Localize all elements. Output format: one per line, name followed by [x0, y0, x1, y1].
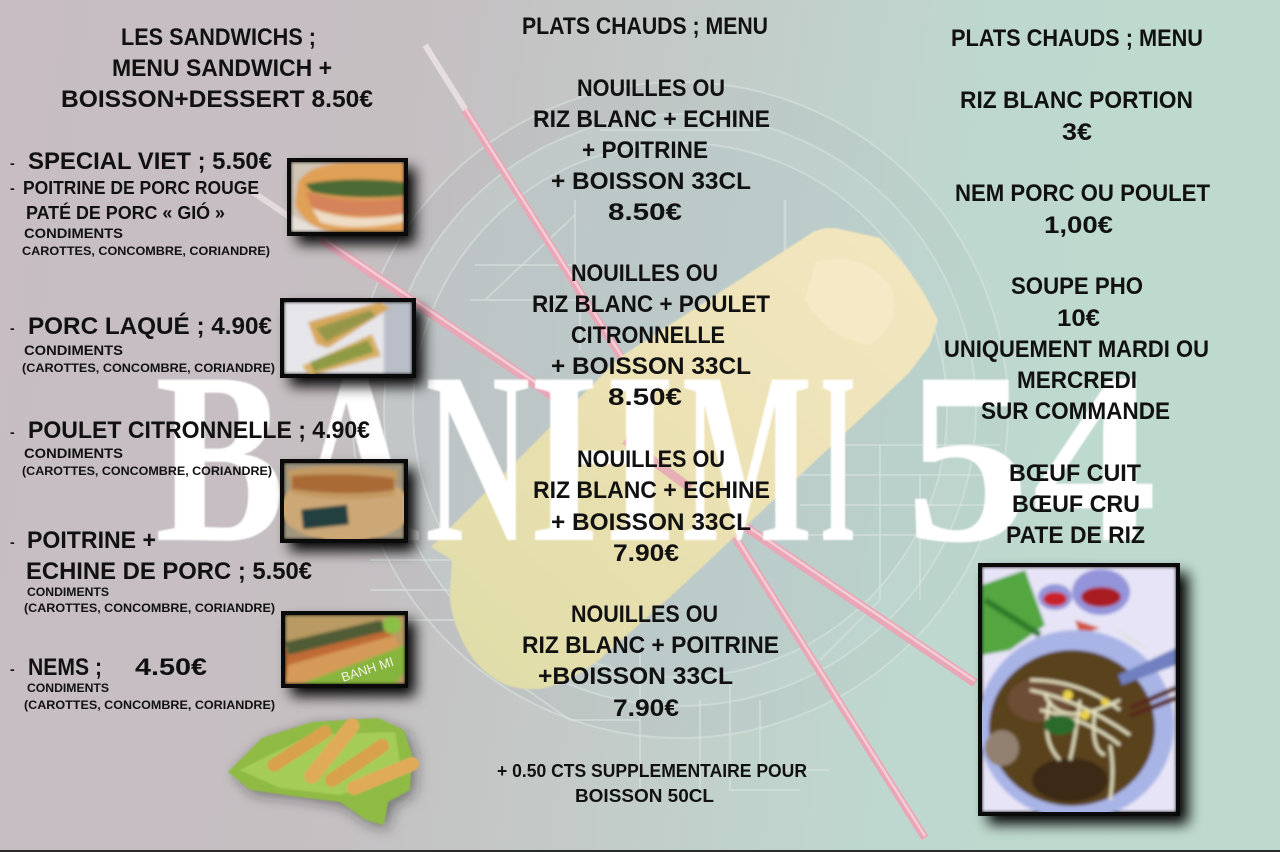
item: poulet citronnelle: POULET CITRONNELLE ; 4.90€ — [28, 417, 370, 444]
menu: echine et poitrine: + POITRINE — [582, 137, 708, 164]
item: poulet citronnelle: CONDIMENTS — [24, 445, 123, 461]
note: drink supplement: BOISSON 50CL — [575, 786, 714, 806]
item: soupe pho: MERCREDI — [1017, 367, 1137, 394]
menu: echine et poitrine: 8.50€ — [608, 199, 682, 226]
photo: banh mi with green banner — [281, 611, 415, 696]
item: soup options: PATE DE RIZ — [1006, 522, 1145, 549]
restaurant name: BANH MI 54: N — [425, 322, 530, 593]
item: soupe pho: SUR COMMANDE — [981, 398, 1170, 425]
menu: poulet citronnelle: CITRONNELLE — [571, 322, 725, 349]
heading: hot dishes right: PLATS CHAUDS ; MENU — [951, 25, 1203, 52]
menu: echine et poitrine: NOUILLES OU — [577, 75, 725, 102]
restaurant name: BANH MI 54: I — [820, 322, 856, 593]
item: riz blanc: 3€ — [1062, 119, 1092, 146]
panel: hot dishes menu, centre — [497, 13, 807, 806]
item: special viet: - — [10, 155, 15, 171]
chopstick: long diagonal — [425, 45, 925, 838]
item: poitrine echine: - — [10, 534, 15, 550]
photo: banh mi with green banner: BANH MI — [339, 654, 395, 685]
item: special viet: POITRINE DE PORC ROUGE — [23, 178, 259, 198]
item: nems: 4.50€ — [135, 654, 207, 681]
item: porc laque: (CAROTTES, CONCOMBRE, CORIANDRE) — [22, 363, 275, 375]
photo: special viet sandwich — [287, 158, 415, 244]
item: porc laque: PORC LAQUÉ ; 4.90€ — [28, 312, 272, 340]
item: poulet citronnelle: - — [10, 424, 15, 440]
photo: nems on lettuce — [228, 718, 416, 829]
item: soup options — [1006, 460, 1145, 549]
photo: porc laque sandwiches — [280, 298, 423, 386]
chopstick seen through roll — [625, 440, 690, 488]
item: nems: NEMS ; — [28, 654, 102, 681]
item: special viet: - — [10, 180, 15, 196]
item: special viet: CAROTTES, CONCOMBRE, CORIANDRE) — [22, 246, 270, 258]
item: nem — [955, 180, 1210, 239]
item: poitrine echine: ECHINE DE PORC ; 5.50€ — [26, 558, 312, 585]
menu: echine et poitrine — [533, 75, 770, 226]
item: porc laque: CONDIMENTS — [24, 342, 123, 358]
heading: sandwich menu: BOISSON+DESSERT 8.50€ — [61, 86, 373, 113]
panel: hot dishes menu, right — [944, 25, 1210, 549]
photo: poulet citronnelle sandwich — [280, 459, 415, 551]
item: nems: (CAROTTES, CONCOMBRE, CORIANDRE) — [24, 700, 275, 712]
item: nem: 1,00€ — [1044, 212, 1113, 239]
item: special viet — [10, 148, 272, 258]
menu: echine: 7.90€ — [613, 540, 679, 567]
restaurant name: BANH MI 54: H — [532, 322, 672, 593]
item: poulet citronnelle: (CAROTTES, CONCOMBRE, CORIANDRE) — [22, 466, 272, 478]
item: riz blanc — [960, 87, 1193, 146]
menu: echine: NOUILLES OU — [577, 446, 725, 473]
item: soup options: BŒUF CUIT — [1009, 460, 1141, 487]
spring roll illustration — [431, 228, 938, 689]
heading: sandwich menu: MENU SANDWICH + — [112, 55, 332, 82]
menu: poitrine: RIZ BLANC + POITRINE — [522, 632, 779, 659]
item: porc laque — [10, 312, 275, 375]
menu: poulet citronnelle — [532, 260, 770, 411]
restaurant name: BANH MI 54: 5 — [905, 322, 1030, 593]
menu: poitrine: NOUILLES OU — [571, 601, 718, 628]
menu: poulet citronnelle: + BOISSON 33CL — [551, 353, 751, 380]
heading: sandwich menu — [61, 24, 373, 113]
restaurant name: BANH MI 54: 4 — [1032, 322, 1157, 593]
menu: poulet citronnelle: NOUILLES OU — [571, 260, 718, 287]
item: special viet: CONDIMENTS — [24, 225, 123, 241]
item: soup options: BŒUF CRU — [1012, 491, 1140, 518]
menu: echine et poitrine: RIZ BLANC + ECHINE — [533, 106, 770, 133]
item: special viet: PATÉ DE PORC « GIÓ » — [26, 202, 225, 223]
menu: echine: + BOISSON 33CL — [551, 509, 751, 536]
item: nems: CONDIMENTS — [27, 683, 109, 695]
item: poitrine echine: (CAROTTES, CONCOMBRE, CORIANDRE) — [24, 603, 275, 615]
item: soupe pho: SOUPE PHO — [1011, 273, 1143, 300]
menu: poulet citronnelle: RIZ BLANC + POULET — [532, 291, 770, 318]
note: drink supplement: + 0.50 CTS SUPPLEMENTAIRE POUR — [497, 761, 807, 781]
panel: sandwiches — [10, 24, 373, 712]
heading: hot dishes: PLATS CHAUDS ; MENU — [522, 13, 768, 40]
item: poitrine echine — [10, 527, 312, 615]
item: special viet: SPECIAL VIET ; 5.50€ — [28, 148, 272, 175]
restaurant name: BANH MI 54: B — [155, 322, 285, 593]
item: nems — [10, 654, 275, 712]
note: drink supplement — [497, 761, 807, 806]
menu: poitrine: 7.90€ — [613, 695, 679, 722]
menu: poitrine: +BOISSON 33CL — [538, 663, 733, 690]
item: poitrine echine: CONDIMENTS — [27, 587, 109, 599]
restaurant name: BANH MI 54: M — [682, 322, 812, 593]
menu: echine: RIZ BLANC + ECHINE — [533, 477, 770, 504]
menu: poulet citronnelle: 8.50€ — [608, 384, 682, 411]
menu: poitrine — [522, 601, 779, 722]
item: porc laque: - — [10, 320, 15, 336]
item: poulet citronnelle — [10, 417, 370, 478]
heading: sandwich menu: LES SANDWICHS ; — [121, 24, 316, 51]
item: soupe pho: 10€ — [1057, 305, 1100, 332]
menu: echine — [533, 446, 770, 567]
item: soupe pho: UNIQUEMENT MARDI OU — [944, 336, 1209, 363]
item: nems: - — [10, 661, 15, 677]
photo: pho soup bowl — [978, 563, 1188, 824]
item: riz blanc: RIZ BLANC PORTION — [960, 87, 1193, 114]
restaurant name: BANH MI 54 — [155, 322, 1157, 593]
item: poitrine echine: POITRINE + — [27, 527, 156, 554]
item: soupe pho — [944, 273, 1209, 425]
item: nem: NEM PORC OU POULET — [955, 180, 1210, 207]
chopstick: shallow diagonal — [250, 190, 975, 683]
background maze emblem — [352, 82, 1008, 790]
restaurant name: BANH MI 54: A — [290, 322, 420, 593]
menu: echine et poitrine: + BOISSON 33CL — [551, 168, 751, 195]
